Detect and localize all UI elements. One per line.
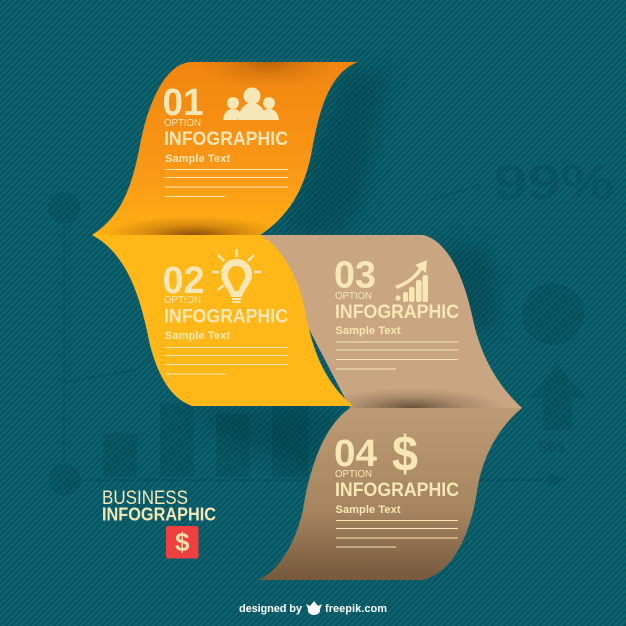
fold shadow 03 [345, 390, 494, 408]
option label 02: OPTION [164, 295, 201, 306]
footer: freepik credit [239, 601, 387, 615]
panel: option 02 [92, 235, 353, 406]
title line 1: BUSINESS [102, 488, 188, 509]
ribbon drop shadows [185, 70, 500, 470]
title: business infographic [102, 488, 216, 524]
icon: dollar sign: $ [392, 426, 418, 482]
top fold shadow 01 [214, 62, 322, 82]
ghost bars [103, 403, 308, 477]
ghost axes [63, 220, 566, 487]
ghost up arrow [529, 364, 586, 430]
icon: rising chart [395, 260, 428, 302]
number 01: 01 [162, 82, 204, 124]
heading 01: INFOGRAPHIC [164, 129, 288, 150]
credit: freepik.com: freepik.com [325, 603, 387, 615]
sample text 03: Sample Text [336, 325, 401, 337]
panel: option 01 [92, 62, 358, 235]
sample text 02: Sample Text [165, 330, 230, 342]
icon: red dollar badge [166, 526, 198, 558]
number 02: 02 [162, 260, 204, 302]
ribbon 04 [259, 408, 522, 580]
heading 04: INFOGRAPHIC [335, 480, 459, 501]
number 04: 04 [334, 433, 377, 475]
ghost circle [522, 283, 584, 345]
sample text 04: Sample Text [336, 504, 401, 516]
heading 03: INFOGRAPHIC [335, 302, 459, 323]
number 03: 03 [334, 254, 376, 296]
ghost 99 percent: 99% [494, 156, 614, 210]
text lines 04 [336, 520, 458, 548]
icon: light bulb [212, 249, 261, 303]
bottom fold shadow 01 [113, 218, 268, 235]
option label 04: OPTION [335, 469, 372, 480]
ribbon 02 [92, 235, 353, 406]
panel: option 04 [259, 408, 522, 580]
text lines 01 [165, 169, 288, 197]
ribbon 03 [260, 235, 522, 408]
icon: group of people [223, 88, 279, 120]
ghost trend line [65, 185, 480, 382]
ghost chart background [48, 156, 614, 496]
ribbon 01 [92, 62, 358, 235]
icon: freepik logo [306, 601, 322, 615]
text lines 02 [165, 347, 288, 374]
sample text 01: Sample Text [165, 153, 230, 165]
text lines 03 [336, 342, 458, 370]
heading 02: INFOGRAPHIC [164, 306, 288, 328]
panel: option 03 [260, 235, 522, 408]
icon: red dollar badge: $ [175, 527, 190, 557]
option label 01: OPTION [164, 118, 201, 129]
title line 2: INFOGRAPHIC [102, 504, 216, 524]
ghost dollar signs: $$$ [538, 439, 565, 456]
credit: designed by: designed by [239, 603, 303, 615]
option label 03: OPTION [335, 291, 372, 302]
ghost axis dots [48, 192, 81, 496]
